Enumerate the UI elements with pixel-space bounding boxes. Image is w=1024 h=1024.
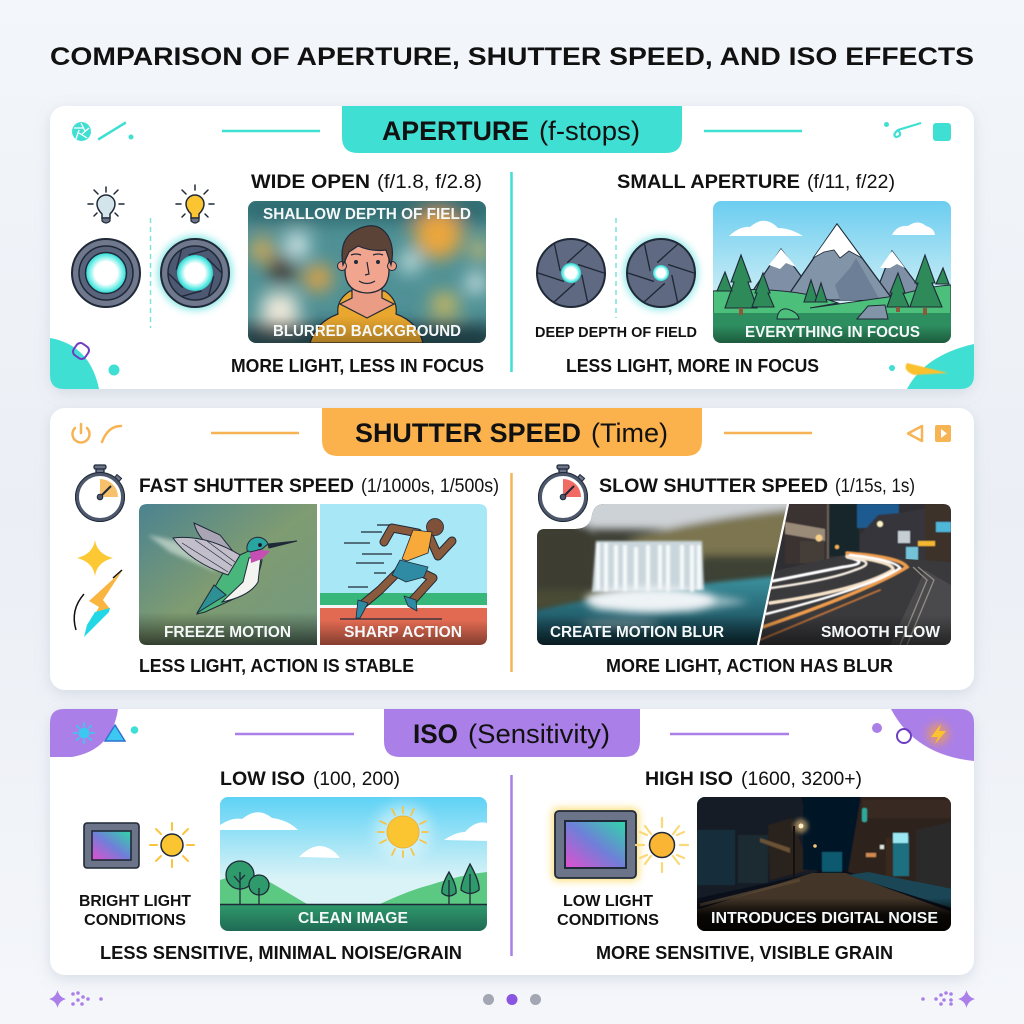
photo: night light trails: SMOOTH FLOW xyxy=(821,624,940,641)
dashed divider xyxy=(150,218,152,328)
trees in photo xyxy=(226,861,479,904)
photo: waterfall xyxy=(537,504,787,645)
tab: shutter speed: SHUTTER SPEED xyxy=(355,418,581,448)
photo: night street xyxy=(697,797,951,931)
photo: shallow depth of field xyxy=(248,201,486,343)
photo: hummingbird: FREEZE MOTION xyxy=(164,624,291,641)
sun in photo xyxy=(378,807,428,857)
caption: less light action: LESS LIGHT, ACTION IS STABLE xyxy=(139,656,414,676)
icon: dim sun xyxy=(636,818,688,872)
label: bright light conditions: CONDITIONS xyxy=(84,912,186,929)
heading: small aperture: (f/11, f/22) xyxy=(807,172,895,193)
panel: aperture xyxy=(50,106,974,389)
panel: shutter speed xyxy=(50,408,974,690)
heading: fast shutter: FAST SHUTTER SPEED xyxy=(139,476,354,497)
heading: high ISO: (1600, 3200+) xyxy=(741,769,862,790)
heading: fast shutter: (1/1000s, 1/500s) xyxy=(361,476,499,497)
tab: aperture: (f-stops) xyxy=(539,116,640,146)
label: bright light conditions xyxy=(79,893,192,929)
corner decoration: aperture bottom right xyxy=(889,344,974,389)
icon: small aperture glowing xyxy=(624,236,698,310)
corner decoration: aperture top left xyxy=(72,122,134,141)
person illustration xyxy=(310,226,423,343)
icon: large sensor glowing xyxy=(552,808,639,881)
label: deep depth of field: DEEP DEPTH OF FIELD xyxy=(535,325,697,341)
corner decoration: ISO top right xyxy=(872,709,974,761)
heading: low ISO: LOW ISO xyxy=(220,769,305,790)
label: low light conditions: LOW LIGHT xyxy=(563,893,654,910)
icon: bright sun xyxy=(150,823,194,867)
tab: aperture: APERTURE xyxy=(382,116,529,146)
runner illustration xyxy=(356,518,452,618)
photo: runner: SHARP ACTION xyxy=(344,624,462,641)
footer decoration left xyxy=(49,990,103,1008)
heading: high ISO: HIGH ISO xyxy=(645,769,733,790)
caption: less light: LESS LIGHT, MORE IN FOCUS xyxy=(566,356,819,376)
photo: shallow depth of field: SHALLOW DEPTH OF FIELD xyxy=(263,206,471,223)
corner decoration: ISO top left xyxy=(50,709,138,757)
caption: more light: MORE LIGHT, LESS IN FOCUS xyxy=(231,356,484,376)
photo: runner xyxy=(320,504,487,645)
tab: ISO xyxy=(384,709,640,757)
icon: small aperture xyxy=(537,239,605,307)
photo: clean landscape: CLEAN IMAGE xyxy=(298,910,408,927)
tab: shutter speed xyxy=(322,408,702,456)
dashed divider xyxy=(615,218,617,318)
heading: high ISO xyxy=(645,769,862,790)
heading: wide open: WIDE OPEN xyxy=(251,172,370,193)
cascade xyxy=(592,541,704,592)
label: low light conditions: CONDITIONS xyxy=(557,912,659,929)
heading: low ISO xyxy=(220,769,400,790)
heading: small aperture xyxy=(617,172,895,193)
corner decoration: aperture bottom left xyxy=(50,338,120,389)
caption: more light action: MORE LIGHT, ACTION HAS BLUR xyxy=(606,656,893,676)
title: COMPARISON OF APERTURE, SHUTTER SPEED, AND ISO EFFECTS xyxy=(50,43,974,71)
tab: shutter speed: (Time) xyxy=(591,418,668,448)
icon: wide aperture lens xyxy=(72,239,140,307)
icon: wide aperture glowing xyxy=(158,236,232,310)
icon: lit bulb xyxy=(176,185,214,223)
caption: less sensitive: LESS SENSITIVE, MINIMAL NOISE/GRAIN xyxy=(100,943,462,963)
heading: wide open xyxy=(251,172,482,193)
label: bright light conditions: BRIGHT LIGHT xyxy=(79,893,192,910)
light trails xyxy=(760,553,907,640)
heading: slow shutter: (1/15s, 1s) xyxy=(835,476,915,497)
trees xyxy=(717,255,949,308)
tab: ISO: ISO xyxy=(413,719,458,749)
icon: sparkle star xyxy=(77,540,113,576)
corner decoration: shutter top left xyxy=(72,424,121,443)
photo: hummingbird xyxy=(139,504,317,645)
hummingbird illustration xyxy=(173,523,297,614)
label: low light conditions xyxy=(557,893,659,929)
photo: waterfall: CREATE MOTION BLUR xyxy=(550,624,724,641)
icon: small sensor xyxy=(84,823,139,868)
heading: small aperture: SMALL APERTURE xyxy=(617,172,800,193)
pagination dots xyxy=(483,994,541,1005)
photo: clean landscape xyxy=(220,797,487,931)
photo: mountains: EVERYTHING IN FOCUS xyxy=(745,324,920,341)
heading: fast shutter xyxy=(139,476,499,497)
corner decoration: shutter top right xyxy=(908,425,951,442)
icon: slow stopwatch xyxy=(538,465,588,522)
photo: shallow depth of field: BLURRED BACKGROUND xyxy=(273,323,461,340)
corner decoration: aperture top right xyxy=(884,122,951,141)
tab: ISO: (Sensitivity) xyxy=(468,719,610,749)
footer decoration right xyxy=(921,990,975,1008)
tab: aperture xyxy=(342,106,682,153)
icon: lightning bolt xyxy=(74,570,122,637)
panel: ISO xyxy=(50,709,974,975)
photo: mountains xyxy=(713,201,951,343)
caption: more sensitive: MORE SENSITIVE, VISIBLE GRAIN xyxy=(596,943,893,963)
heading: slow shutter: SLOW SHUTTER SPEED xyxy=(599,476,828,497)
icon: dim bulb xyxy=(88,187,124,223)
photo: night street: INTRODUCES DIGITAL NOISE xyxy=(711,910,938,927)
photo: night light trails xyxy=(755,500,955,650)
heading: low ISO: (100, 200) xyxy=(313,769,400,790)
icon: fast stopwatch xyxy=(76,465,124,522)
heading: wide open: (f/1.8, f/2.8) xyxy=(377,172,482,193)
